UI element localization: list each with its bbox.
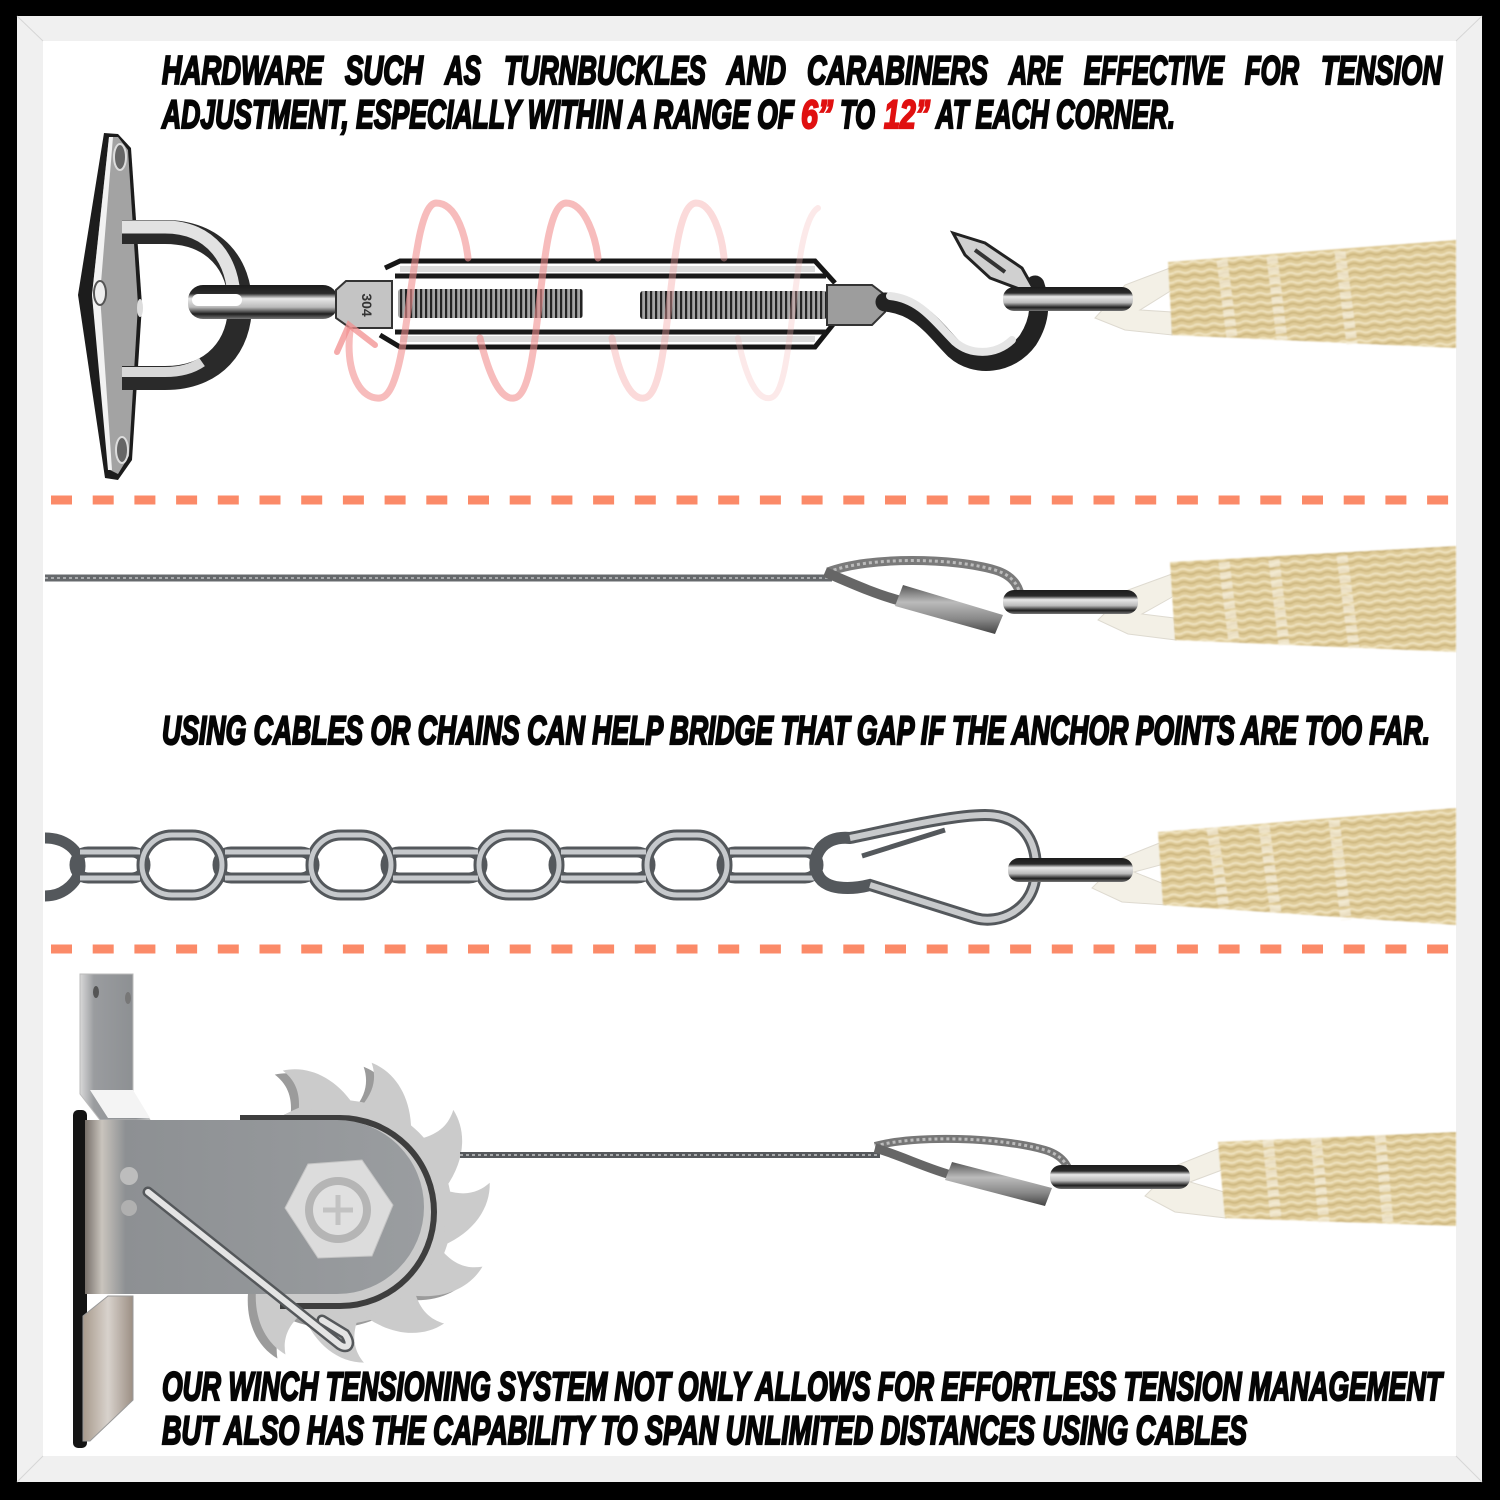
- icon: connecting ring: [1003, 287, 1133, 311]
- icon: ratchet gear: [228, 1061, 490, 1363]
- icon: connecting ring: [1003, 590, 1138, 614]
- icon: rotation spiral arrows: [337, 203, 818, 398]
- panel: turnbuckle assembly: [78, 133, 1456, 480]
- icon: lower mounting plate: [83, 1296, 133, 1441]
- icon: cable loop: [825, 560, 1020, 604]
- icon: steel cable: [460, 1152, 880, 1158]
- heading: turnbuckles and carabiners: ARE: [1008, 49, 1063, 93]
- icon: turnbuckle frame: [336, 261, 885, 347]
- icon: eye bolt: [188, 285, 338, 319]
- icon: webbing loop: [1098, 574, 1176, 640]
- icon: chain highlights: [80, 835, 815, 895]
- icon: S hook: [885, 233, 1040, 361]
- icon: carabiner: [815, 815, 1036, 920]
- icon: body rivets: [120, 1167, 138, 1216]
- panel: winch assembly: [73, 974, 1456, 1448]
- icon: connecting ring: [1050, 1165, 1190, 1189]
- icon: sail strap: [1218, 1132, 1456, 1226]
- heading: turnbuckles and carabiners: CARABINERS: [807, 49, 988, 93]
- icon: cable loop: [875, 1139, 1070, 1182]
- heading: turnbuckles and carabiners: ADJUSTMENT, ESPECIALLY WITHIN A RANGE OF: [161, 93, 795, 137]
- icon: webbing loop: [1145, 1148, 1226, 1218]
- icon: winch body: [85, 1120, 424, 1294]
- heading: winch tensioning system: [162, 1365, 1444, 1453]
- icon: black backing: [73, 1110, 87, 1448]
- icon: wall plate: [78, 133, 143, 480]
- icon: dark gasket: [240, 1118, 434, 1306]
- heading: turnbuckles and carabiners: AND: [726, 49, 786, 93]
- heading: turnbuckles and carabiners: FOR: [1245, 49, 1299, 93]
- icon: cable crimp: [895, 585, 1003, 634]
- panel: cable connection: [45, 546, 1456, 652]
- icon: steel cable: [45, 574, 832, 582]
- icon: hex nut: [285, 1160, 393, 1258]
- icon: chain: [45, 835, 818, 896]
- section divider 1: [51, 496, 1450, 504]
- heading: turnbuckles and carabiners: TO: [840, 93, 875, 137]
- icon: turnbuckle frame: 304: [359, 293, 375, 317]
- heading: turnbuckles and carabiners: HARDWARE: [162, 49, 324, 93]
- icon: gear back teeth: [220, 1065, 475, 1359]
- heading: turnbuckles and carabiners: TURNBUCKLES: [504, 49, 706, 93]
- icon: sail strap: [1170, 546, 1456, 652]
- icon: cable crimp: [945, 1162, 1052, 1206]
- heading: turnbuckles and carabiners: 6”: [801, 93, 833, 137]
- heading: turnbuckles and carabiners: EFFECTIVE: [1084, 49, 1225, 93]
- icon: webbing loop: [1092, 842, 1166, 905]
- heading: turnbuckles and carabiners: AT EACH CORNER.: [935, 93, 1175, 137]
- panel: chain connection: [45, 808, 1456, 925]
- heading: turnbuckles and carabiners: SUCH: [345, 49, 424, 93]
- icon: connecting ring: [1008, 858, 1133, 882]
- icon: D-ring: [122, 227, 240, 378]
- section divider 2: [51, 944, 1450, 954]
- icon: hook pin: [148, 1192, 349, 1347]
- icon: webbing loop: [1095, 268, 1172, 335]
- heading: turnbuckles and carabiners: TENSION: [1321, 49, 1443, 93]
- heading: turnbuckles and carabiners: [161, 49, 1443, 137]
- icon: sail strap: [1168, 240, 1456, 348]
- icon: upper mounting plate: [80, 974, 150, 1120]
- heading: turnbuckles and carabiners: AS: [444, 49, 481, 93]
- heading: turnbuckles and carabiners: 12”: [884, 93, 930, 137]
- icon: sail strap: [1158, 808, 1456, 925]
